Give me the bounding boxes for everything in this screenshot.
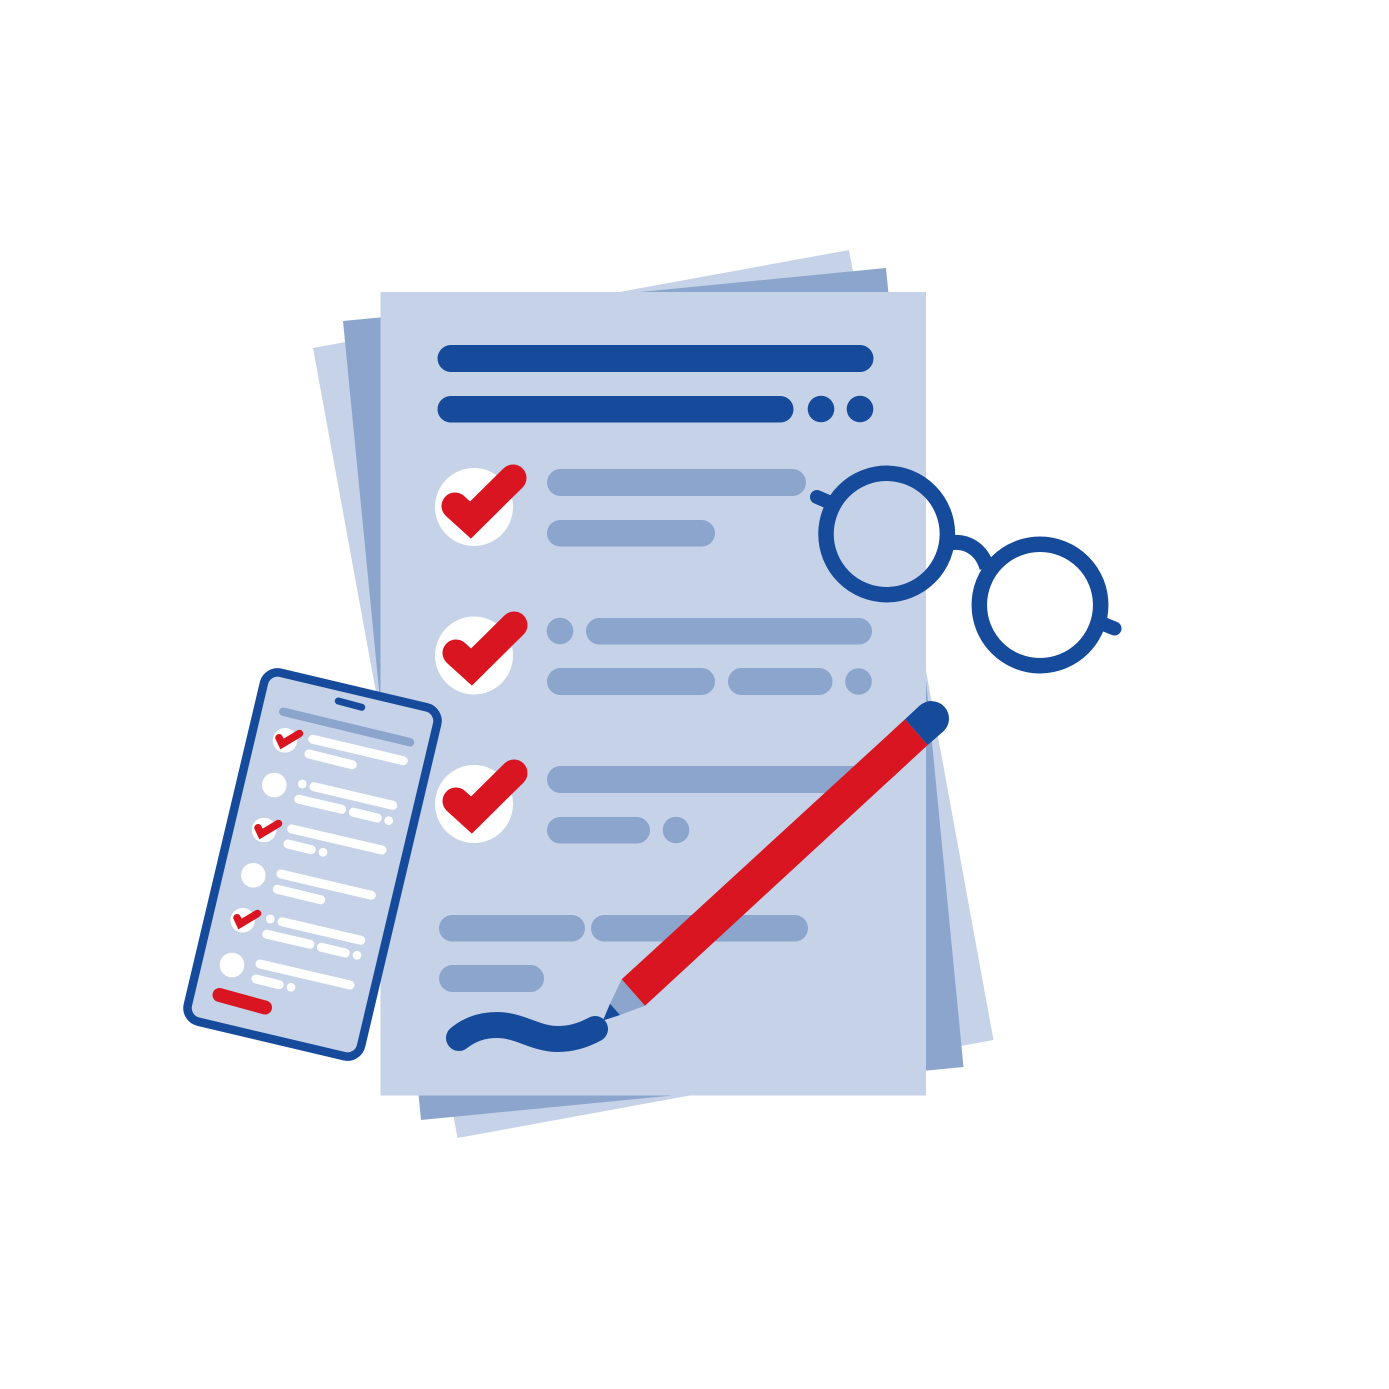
- text bars 3: [547, 766, 867, 844]
- signature text bars: [439, 915, 808, 992]
- text bars 1: [547, 469, 806, 546]
- phone body: [185, 670, 440, 1059]
- back sheet: light: [313, 250, 994, 1138]
- pen point: [603, 1004, 620, 1020]
- phone list bars: [256, 739, 403, 985]
- pen: [603, 701, 949, 1020]
- checklist item 2: [435, 616, 872, 695]
- red tick 3: [456, 773, 514, 815]
- glasses: [817, 473, 1114, 666]
- check circle 2: [435, 616, 513, 694]
- phone red ticks: [237, 734, 300, 924]
- check circle 3: [435, 765, 513, 843]
- main sheet: [380, 292, 926, 1096]
- phone: [185, 670, 440, 1059]
- left temple: [817, 497, 831, 503]
- red tick 2: [456, 625, 514, 667]
- phone red button: [220, 995, 265, 1008]
- red tick 1: [455, 478, 513, 520]
- pen cap: [905, 701, 949, 745]
- checklist item 1: [435, 468, 806, 546]
- bridge: [950, 542, 987, 568]
- left lens: [826, 473, 947, 595]
- right lens: [979, 544, 1101, 666]
- pen nib: [610, 979, 645, 1015]
- phone list circles and dots: [220, 728, 393, 992]
- text bars 2: [547, 618, 872, 695]
- phone header bar: [283, 712, 410, 742]
- signature squiggle: [459, 1025, 595, 1039]
- checklist item 3: [435, 765, 867, 844]
- phone notch: [338, 701, 362, 707]
- check circle 1: [435, 468, 513, 546]
- back sheet: mid blue: [343, 268, 964, 1120]
- heading bars: [438, 345, 874, 422]
- pen body: [622, 719, 928, 1006]
- right temple: [1101, 623, 1114, 628]
